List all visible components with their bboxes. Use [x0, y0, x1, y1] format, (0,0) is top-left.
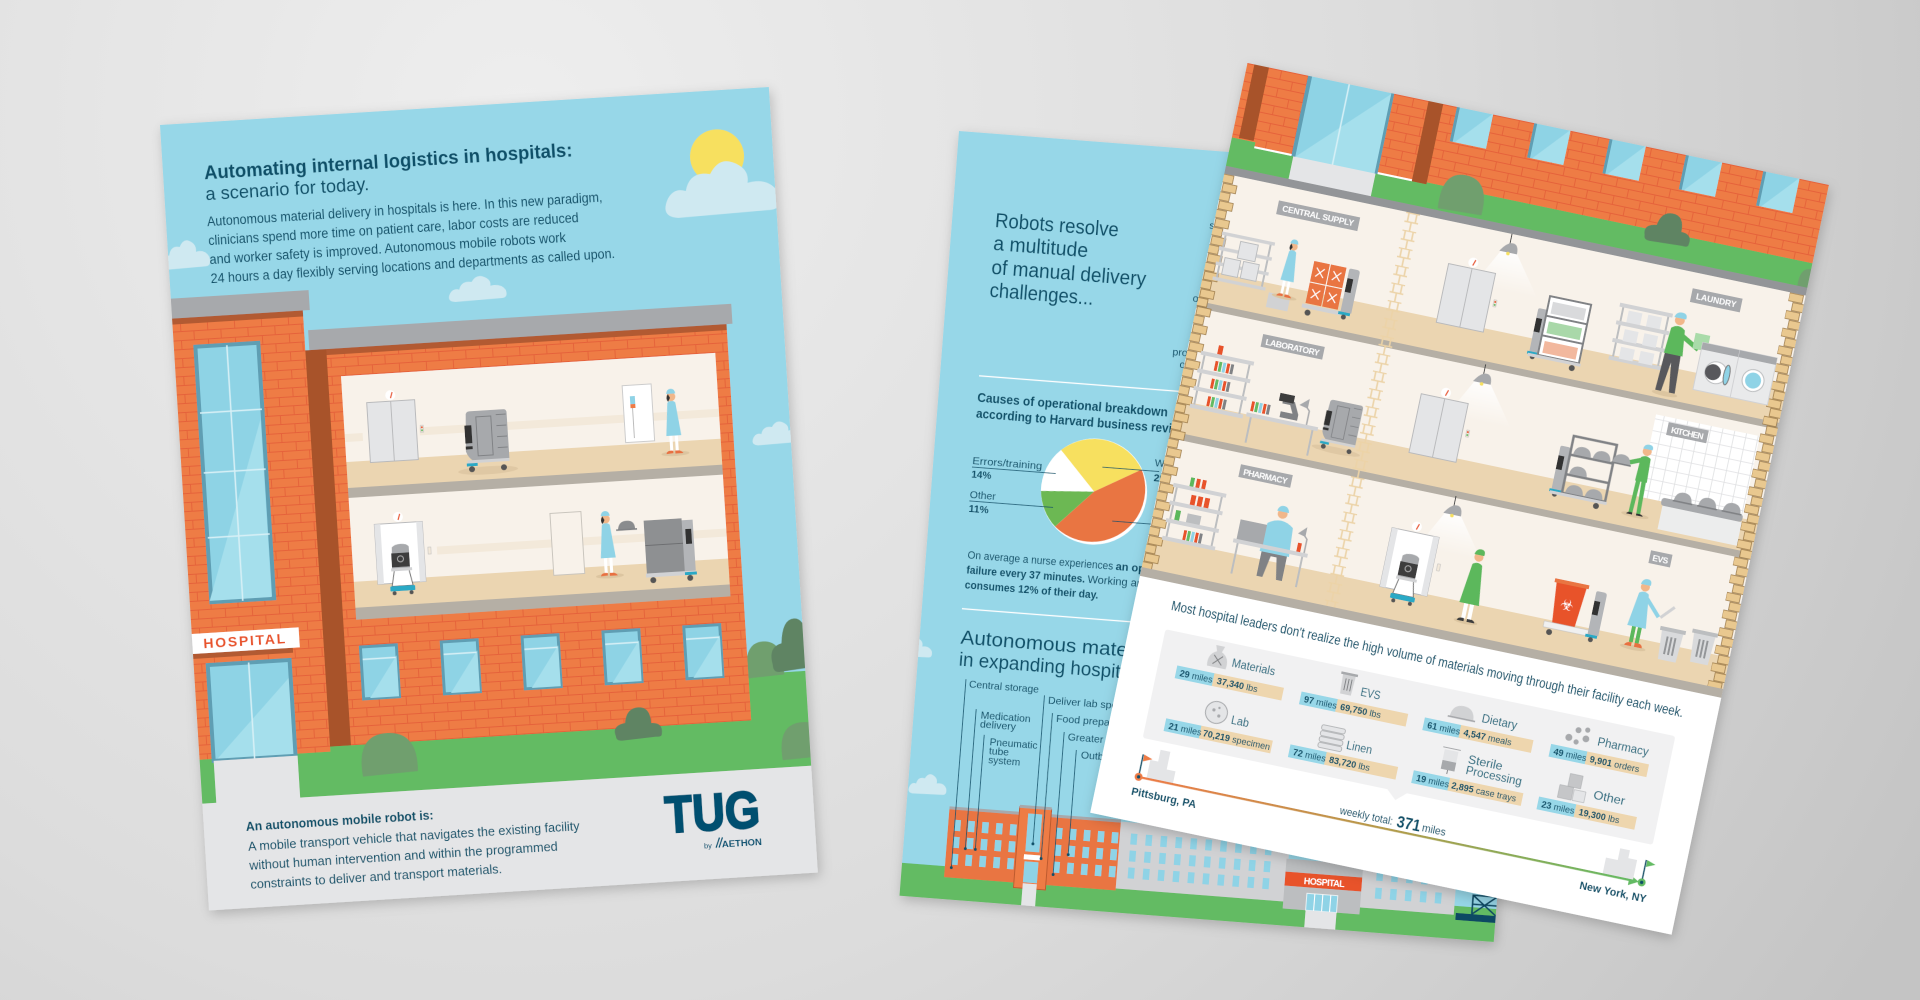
weekly total: [1337, 800, 1448, 841]
pie labels: Other: [969, 489, 997, 503]
pie labels: 14%: [971, 469, 992, 482]
chart heading: according to Harvard business review: [976, 407, 1188, 437]
nurse statistic paragraph: an operational: [1115, 561, 1191, 579]
hospital block: [1281, 872, 1362, 931]
room label: kitchen: [1666, 422, 1709, 443]
location labels: Food preparation: [1056, 713, 1137, 731]
department: EVS: 97 miles: [1303, 694, 1338, 711]
footer definition text: [246, 810, 580, 889]
department: lab: 21 miles: [1168, 721, 1203, 738]
department: linen: 72 miles: [1292, 747, 1327, 764]
nurse upper floor: [662, 388, 690, 456]
robot with biohazard bin: ☣: [1559, 596, 1575, 615]
department: dietary: 61 miles: [1426, 720, 1462, 737]
end: New York marker: [1578, 842, 1657, 906]
weekly total: weekly total:: [1338, 805, 1394, 828]
department: materials: [1175, 638, 1290, 701]
department: lab: Lab: [1230, 715, 1250, 730]
TUG logo: TUG: [663, 781, 762, 845]
icon: cloche: [1448, 703, 1478, 722]
room: central supply: [1209, 190, 1371, 324]
department: materials: Materials: [1231, 658, 1276, 679]
department: linen: [1288, 719, 1403, 780]
trash cans: [1652, 605, 1722, 670]
tower wing: [171, 290, 337, 760]
footer definition text: constraints to deliver and transport materials.: [250, 862, 502, 892]
chart heading: [976, 391, 1190, 437]
location labels: delivery: [980, 718, 1017, 733]
main wing: [304, 304, 757, 747]
elevator lower floor: [374, 510, 433, 584]
route line with arrow: [1137, 771, 1640, 887]
EVS nurse: [1619, 576, 1666, 654]
room label: LABORATORY: [1265, 337, 1321, 358]
cart lower floor: [643, 518, 697, 584]
room label: EVS: EVS: [1652, 553, 1670, 566]
pie labels: Waiting: [1154, 457, 1190, 472]
department: dietary: 4,547 meals: [1463, 728, 1513, 748]
bush: front left: [360, 731, 418, 777]
location labels: Medication: [980, 709, 1031, 725]
room label: PHARMACY: [1242, 467, 1289, 486]
department: pharmacy: 49 miles: [1553, 747, 1588, 763]
robot with food shelves: [1547, 433, 1619, 511]
footer definition text: without human intervention and within the programmed: [248, 840, 558, 873]
tall window: [194, 343, 274, 603]
icon: sack: [1207, 644, 1230, 669]
pendant lamp 3: [1417, 490, 1493, 561]
pharmacist at desk: [1226, 497, 1317, 588]
TUG logo: AETHON: [722, 837, 762, 850]
grass: [899, 863, 1496, 942]
entrance door and sidewalk: [1286, 76, 1394, 198]
robot lab: [1311, 397, 1370, 459]
text fragments along the right column: s: [1209, 220, 1215, 232]
small clouds: [883, 636, 958, 796]
right side brick column: [1707, 292, 1810, 690]
laundry shelves: [1608, 303, 1673, 371]
department: linen: Linen: [1345, 740, 1373, 757]
nurse statistic paragraph: On average a nurse experiences: [967, 549, 1114, 573]
pendant lamp 2: [1446, 359, 1523, 429]
text fragments along the right column: o: [1192, 293, 1199, 305]
weekly total: 371: [1395, 812, 1422, 836]
icon: middle cloud: [448, 274, 507, 302]
subtitle: a scenario for today.: [205, 174, 370, 204]
intro paragraph: [207, 189, 615, 286]
intro paragraph: and worker safety is improved. Autonomous mobile robots work: [209, 230, 566, 267]
sidewalk: [214, 756, 300, 799]
exterior bushes: [1437, 166, 1829, 291]
supply shelf: [1212, 231, 1275, 291]
department: EVS: EVS: [1359, 687, 1382, 703]
building interior: [1140, 166, 1807, 698]
start: Pittsburgh marker: [1130, 746, 1206, 811]
heading: [990, 213, 1146, 306]
intro paragraph: 24 hours a day flexibly serving locations and departments as called upon.: [210, 246, 615, 286]
section heading: in expanding hospitals: [958, 649, 1146, 685]
nurse statistic paragraph: Working around it: [1087, 574, 1174, 592]
department: sterile processing: 19 miles: [1415, 773, 1451, 790]
heading: a multitude: [992, 233, 1089, 262]
department: sterile processing: 2,895 case trays: [1450, 780, 1518, 804]
pie labels: 11%: [968, 503, 990, 516]
text fragments along the right column: pro: [1172, 346, 1188, 359]
location labels: Central storage: [969, 678, 1039, 696]
closed door: [550, 512, 585, 575]
room: laboratory: [1185, 322, 1380, 466]
brick exterior: [1231, 63, 1829, 265]
icon: pills: [1564, 723, 1592, 747]
location leader lines: [950, 679, 1083, 878]
kitchen conveyor: [1656, 489, 1745, 546]
interior brick column: [1324, 212, 1420, 608]
room label: [1238, 464, 1293, 488]
room label: laundry: [1690, 288, 1743, 312]
intro paragraph: Autonomous material delivery in hospitals is here. In this new paradigm,: [207, 190, 603, 229]
end: New York marker: New York, NY: [1578, 880, 1648, 906]
location labels: system: [988, 754, 1021, 769]
icon: right cloud: [752, 422, 791, 446]
windows row: [360, 625, 723, 699]
panel: grey departments box: [1141, 629, 1675, 854]
kitchen tile wall: [1639, 414, 1760, 518]
panel: front brochure page, floor cutaway and weekly miles: [1086, 61, 1842, 937]
department: dietary: Dietary: [1481, 713, 1518, 732]
department: sterile processing: [1411, 742, 1529, 806]
icon: sun: [690, 129, 744, 175]
nurse with tray: [596, 511, 638, 578]
heading: challenges...: [989, 280, 1094, 310]
weekly total: miles: [1421, 822, 1447, 839]
title: Automating internal logistics in hospitals:: [203, 140, 573, 184]
robot upper floor: [454, 408, 518, 476]
pie labels: Errors/training: [972, 455, 1043, 472]
icon: linen stack: [1318, 724, 1346, 752]
icon: bin: [1337, 671, 1358, 696]
location labels: Deliver lab specimens: [1048, 695, 1151, 715]
TUG logo: by: [704, 841, 712, 851]
hospital building: [171, 264, 760, 807]
room label: EVS: [1648, 550, 1673, 567]
intro paragraph: clinicians spend more time on patient care, labor costs are reduced: [208, 210, 579, 248]
elevator 2: [1409, 383, 1477, 464]
elevator upper floor: [366, 388, 425, 463]
department: pharmacy: Pharmacy: [1596, 736, 1650, 759]
room label: laundry: LAUNDRY: [1695, 291, 1738, 309]
entrance door: [208, 660, 296, 761]
hospital sign: HOSPITAL: [203, 630, 286, 651]
transport worker: [1453, 547, 1492, 627]
washing machines: [1693, 342, 1777, 405]
department: materials: 29 miles: [1179, 668, 1214, 685]
location labels: tube: [989, 745, 1010, 759]
department: other: 19,300 lbs: [1578, 807, 1621, 826]
elevator 1: [1436, 253, 1505, 334]
open elevator with robot: [1377, 517, 1448, 610]
icon: petri dish: [1203, 699, 1229, 725]
department: other: Other: [1592, 790, 1626, 808]
text fragments along the right column: o: [1179, 359, 1186, 371]
pie leader lines: [969, 457, 1159, 524]
heading: Robots resolve: [994, 210, 1120, 242]
text fragments along the right column: [1172, 223, 1214, 368]
divider: [962, 609, 1480, 649]
room label: kitchen: KITCHEN: [1670, 425, 1705, 441]
pharmacy shelf: [1162, 474, 1228, 551]
lawn: [1226, 137, 1813, 288]
panel: left brochure page, automating internal logistics: [152, 86, 836, 911]
bush: dark front: [613, 706, 662, 741]
location labels: Pneumatic: [989, 736, 1038, 752]
nurse on step: [1266, 236, 1308, 313]
department: EVS: [1299, 664, 1414, 727]
department: lab: 70,219 specimen: [1202, 728, 1271, 752]
department: lab: [1164, 692, 1278, 753]
pie labels: 29%: [1153, 472, 1176, 486]
orange building: [942, 799, 1122, 912]
department: linen: 83,720 lbs: [1328, 755, 1371, 773]
food service worker: [1601, 438, 1663, 521]
pie labels: [968, 443, 1190, 532]
panel: back brochure page, robots resolve challenges: [875, 129, 1553, 942]
grass: [196, 671, 811, 809]
location labels: [963, 678, 1152, 778]
chart heading: Causes of operational breakdown: [977, 391, 1168, 420]
footer definition text: A mobile transport vehicle that navigates the existing facility: [248, 819, 581, 854]
grey building windows: [1127, 833, 1445, 904]
department: EVS: 69,750 lbs: [1339, 702, 1382, 720]
nurse statistic paragraph: consumes 12% of their day.: [964, 579, 1099, 602]
left side brick column: [1138, 173, 1240, 570]
location labels: Outbound: [1080, 749, 1128, 765]
intro sentence: Most hospital leaders don't realize the high volume of materials moving through their facility each week.: [1170, 597, 1685, 720]
hospital sign: [192, 627, 300, 659]
department: dietary: [1422, 699, 1537, 753]
robot with biohazard bin: [1542, 578, 1608, 645]
room: pharmacy: [1158, 451, 1323, 588]
department: sterile processing: Processing: [1465, 765, 1523, 788]
department: sterile processing: Sterile: [1467, 754, 1504, 773]
pendant lamp 1: [1473, 228, 1549, 299]
icon: IV bag: [1438, 747, 1461, 776]
department: pharmacy: 9,901 orders: [1589, 754, 1641, 775]
hospital block: HOSPITAL: [1303, 876, 1346, 889]
cutaway interior: [341, 353, 730, 620]
exterior windows: [1450, 106, 1800, 213]
grey hospital buildings: [1115, 822, 1459, 922]
TUG logo: [663, 790, 762, 850]
icon: big cloud: [665, 160, 776, 218]
lab shelf: [1190, 342, 1256, 419]
robot with linen shelves: [1525, 294, 1593, 373]
nurse statistic paragraph: failure every 37 minutes.: [966, 564, 1086, 586]
lab table with microscope: [1241, 387, 1324, 457]
room label: CENTRAL SUPPLY: [1281, 203, 1355, 228]
robot with crates: [1300, 260, 1360, 324]
location labels: Greater capacity: [1067, 731, 1146, 749]
divider: [979, 374, 1179, 392]
footer definition text: An autonomous mobile robot is:: [245, 808, 434, 834]
bush: lower right: [782, 722, 810, 760]
heading: of manual delivery: [991, 257, 1147, 291]
department: other: 23 miles: [1541, 799, 1576, 816]
bush: right light: [745, 640, 784, 679]
pie chart: [1041, 439, 1147, 545]
section heading: Autonomous material delivery: [960, 627, 1233, 670]
section heading: [958, 627, 1233, 692]
bush: right dark: [772, 618, 806, 672]
patient room door: [622, 384, 655, 443]
icon: left cloud: [168, 240, 210, 270]
start: Pittsburgh marker: Pittsburg, PA: [1130, 786, 1197, 811]
crane: [1455, 894, 1497, 923]
nurse statistic paragraph: [964, 549, 1191, 609]
icon: boxes: [1557, 772, 1589, 803]
department: pharmacy: [1548, 721, 1654, 777]
department: other: [1536, 768, 1643, 830]
department: materials: 37,340 lbs: [1216, 676, 1259, 694]
robot lower floor: [390, 544, 416, 596]
laundry worker: [1651, 310, 1714, 403]
footer panel: [202, 762, 818, 910]
